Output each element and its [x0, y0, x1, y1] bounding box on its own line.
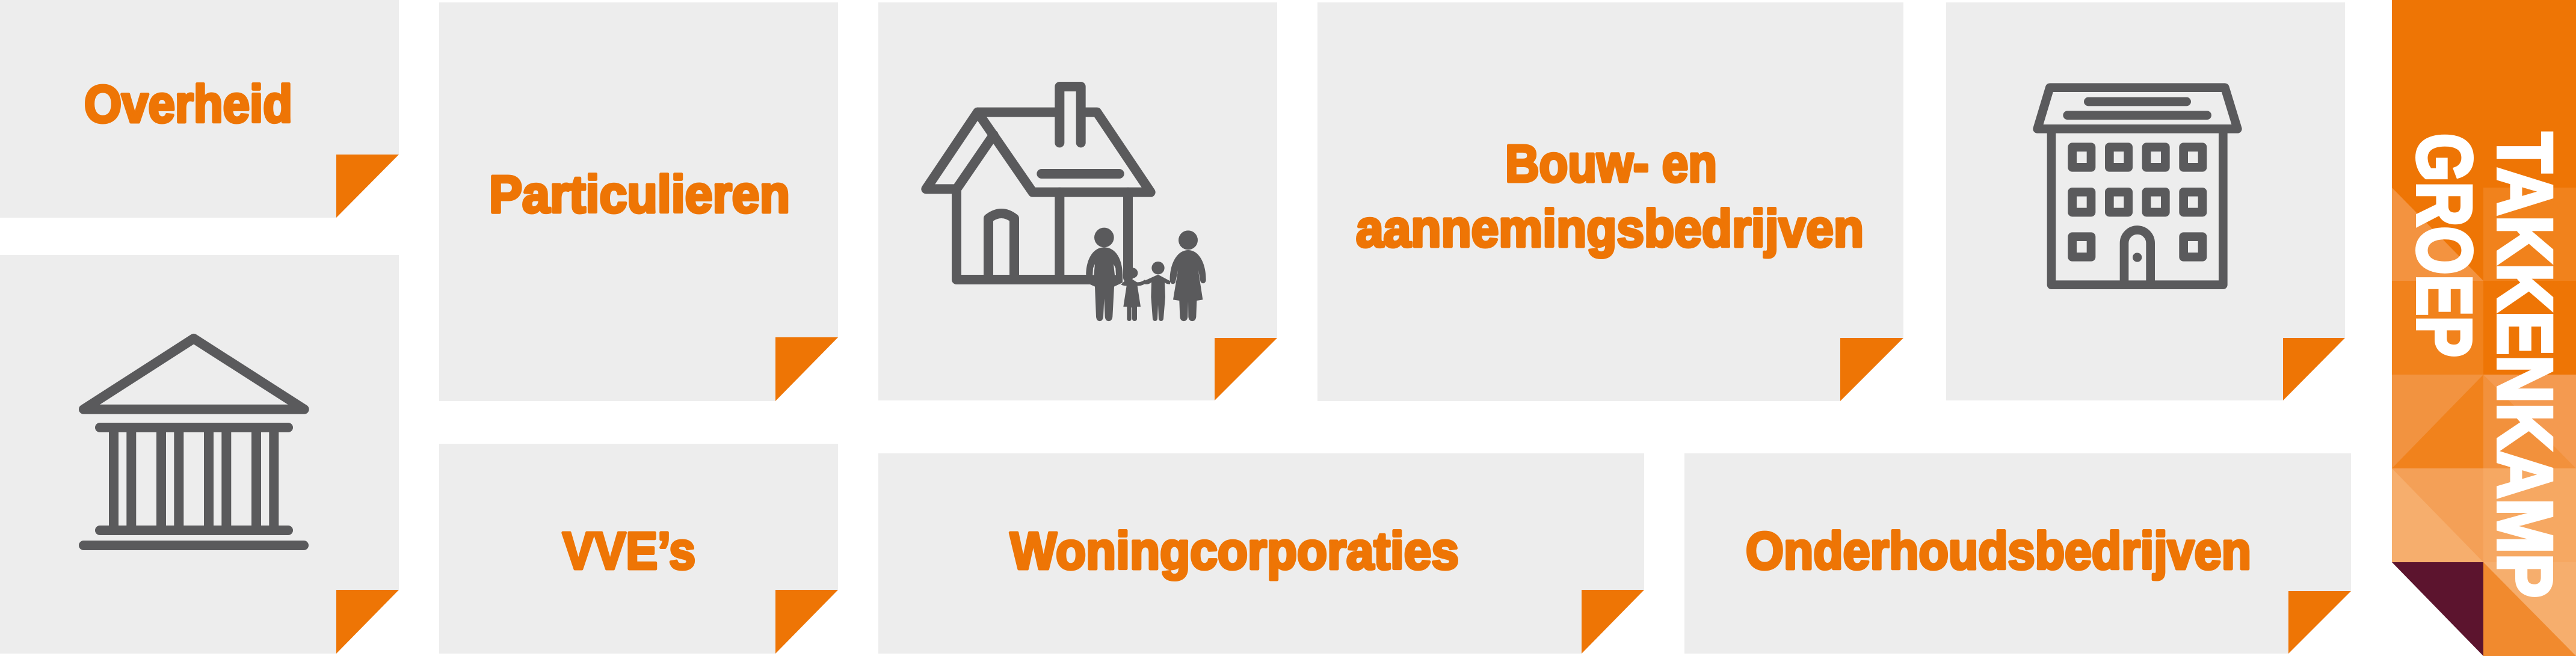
icon: house [926, 87, 1151, 280]
heading: Bouw- en: Bouw- en [1505, 135, 1717, 193]
heading: Onderhoudsbedrijven: Onderhoudsbedrijven [1746, 522, 2251, 580]
panel: Woningcorporaties [878, 453, 1644, 654]
panel: government building icon card [0, 255, 399, 654]
banner text: GROEP: GROEP [2401, 133, 2487, 357]
icon: government building [84, 339, 304, 545]
panel: Bouw- en aannemingsbedrijven [1317, 2, 1903, 401]
panel: Overheid [0, 0, 399, 218]
panel: apartment building icon card [1946, 2, 2345, 400]
panel: Takkenkamp Groep banner [2392, 0, 2576, 656]
heading: VVE's: VVE’s [562, 522, 695, 580]
heading: Particulieren: Particulieren [489, 165, 790, 224]
icon: apartment building [2038, 88, 2237, 285]
heading: aannemingsbedrijven: aannemingsbedrijven [1356, 200, 1864, 258]
heading: Overheid: Overheid [84, 75, 292, 133]
icon: family [1086, 228, 1206, 321]
banner background pattern [2392, 0, 2576, 656]
panel: house and family icon card [878, 2, 1277, 400]
panel: VVE's [439, 444, 838, 654]
panel: Particulieren [439, 2, 838, 401]
heading: Woningcorporaties: Woningcorporaties [1010, 522, 1459, 580]
panel: Onderhoudsbedrijven [1684, 453, 2351, 654]
